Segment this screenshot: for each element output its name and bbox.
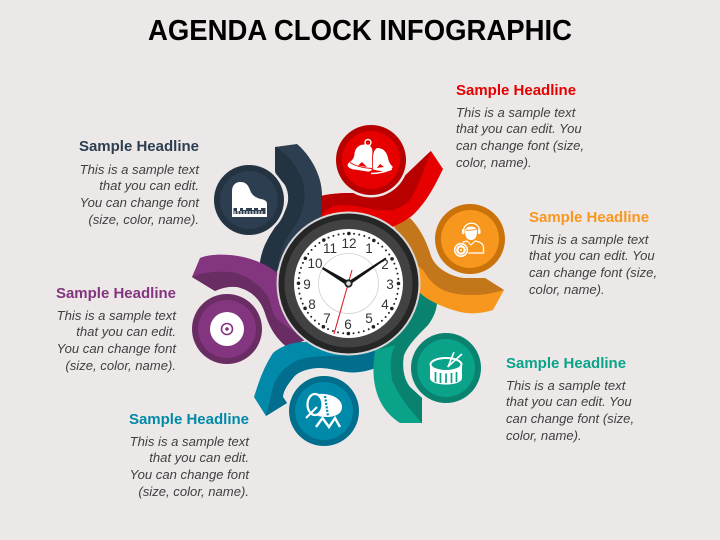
title: AGENDA CLOCK INFOGRAPHIC (148, 15, 572, 47)
text block: teal (506, 355, 634, 443)
text block: blue: that you can edit. (149, 450, 249, 465)
text block: teal: color, name). (506, 428, 582, 443)
text block: red: can change font (size, (456, 138, 584, 153)
text block: blue: You can change font (130, 467, 250, 482)
clock hands (322, 258, 386, 334)
swirl: blue (254, 340, 378, 416)
text block: teal: Sample Headline (506, 355, 626, 372)
text block: blue: Sample Headline (129, 411, 249, 428)
clock numbers: 10 (307, 256, 323, 271)
text block: orange: Sample Headline (529, 209, 649, 226)
clock numbers: 7 (323, 311, 331, 326)
text block: teal: that you can edit. You (506, 394, 632, 409)
swirl: teal (373, 293, 437, 423)
icon: disc (210, 312, 244, 346)
text block: purple: (size, color, name). (65, 358, 176, 373)
circle: orange headset person (432, 202, 508, 276)
swirl: purple (192, 255, 305, 348)
text block: blue (129, 411, 250, 499)
clock (276, 212, 420, 356)
circle: purple disc (190, 292, 264, 366)
clock numbers: 12 (341, 236, 357, 251)
clock numbers: 1 (365, 241, 373, 256)
text block: red: Sample Headline (456, 82, 576, 99)
clock numbers: 8 (308, 297, 316, 312)
icon: bells (347, 140, 393, 174)
text block: orange: that you can edit. You (529, 248, 655, 263)
text block: purple: Sample Headline (56, 285, 176, 302)
clock numbers: 4 (381, 297, 389, 312)
text block: orange: color, name). (529, 282, 605, 297)
swirl: orange (394, 218, 504, 313)
clock numbers: 11 (323, 241, 337, 256)
circle: navy piano (212, 162, 286, 238)
icon: piano (232, 182, 267, 217)
text block: orange: This is a sample text (529, 232, 650, 247)
text block: orange: can change font (size, (529, 265, 657, 280)
icon: person with headset and disc (454, 223, 484, 258)
text block: navy: This is a sample text (80, 162, 200, 177)
text block: navy: (size, color, name). (88, 212, 199, 227)
text block: purple: that you can edit. (76, 324, 176, 339)
clock numbers: 9 (303, 277, 311, 292)
text block: blue: (size, color, name). (138, 484, 249, 499)
text block: teal: This is a sample text (506, 378, 627, 393)
icon: snare drum (430, 352, 462, 384)
text block: red (456, 82, 584, 170)
text block: red: This is a sample text (456, 105, 577, 120)
clock numbers: 5 (365, 311, 373, 326)
text block: purple: This is a sample text (57, 308, 177, 323)
circle: teal drum (408, 330, 484, 406)
text block: navy: Sample Headline (79, 138, 199, 155)
text block: teal: can change font (size, (506, 411, 634, 426)
clock numbers (303, 236, 394, 332)
text block: navy: You can change font (80, 195, 200, 210)
icon: bass drum (306, 394, 342, 427)
text block: navy: that you can edit. (99, 178, 199, 193)
text block: red: that you can edit. You (456, 121, 582, 136)
text block: purple (56, 285, 177, 373)
text block: navy (79, 138, 200, 227)
text block: red: color, name). (456, 155, 532, 170)
circle: blue bass drum (286, 374, 362, 448)
swirl: navy (260, 144, 322, 275)
clock numbers: 3 (386, 277, 394, 292)
clock numbers: 2 (381, 257, 389, 272)
text block: blue: This is a sample text (130, 434, 250, 449)
circle: red bells (334, 122, 408, 198)
swirl: red (321, 151, 443, 240)
clock numbers: 6 (344, 317, 352, 332)
text block: orange (529, 209, 657, 297)
text block: purple: You can change font (57, 341, 177, 356)
